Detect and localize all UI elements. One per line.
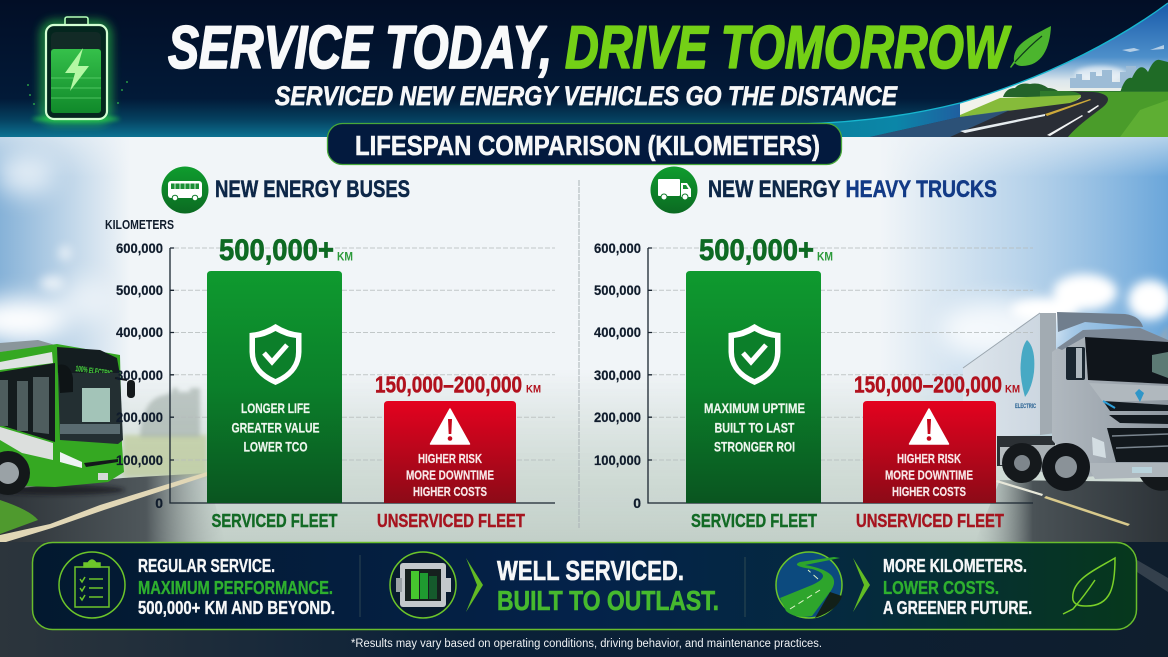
- bar: serviced fleet: KM: [337, 250, 353, 264]
- bar: serviced fleet: KM: [817, 250, 833, 264]
- icon: shield check: [728, 324, 780, 385]
- y axis labels: 300,000: [594, 367, 641, 383]
- section heading: new energy buses: [162, 166, 410, 214]
- bar: serviced fleet: [207, 234, 353, 531]
- bar: unserviced fleet: [375, 372, 541, 531]
- bar: unserviced fleet: [854, 372, 1020, 531]
- icon: leaf: [1010, 26, 1051, 68]
- divider between charts: [578, 180, 580, 528]
- y axis labels: 100,000: [116, 452, 163, 468]
- bar: unserviced fleet: HIGHER RISK: [897, 451, 961, 466]
- bar: unserviced fleet: 150,000–200,000: [854, 372, 1002, 398]
- text: regular service: 500,000+ KM AND BEYOND.: [138, 598, 335, 618]
- illustration: electric heavy truck: [963, 312, 1168, 491]
- icon: glowing battery: [27, 17, 128, 122]
- bar: serviced fleet: SERVICED FLEET: [691, 511, 817, 531]
- bar: serviced fleet: LONGER LIFE: [241, 400, 310, 416]
- text: regular service: REGULAR SERVICE.: [138, 556, 275, 576]
- bar: serviced fleet: 500,000+: [699, 234, 814, 267]
- text: regular service: MAXIMUM PERFORMANCE.: [138, 578, 333, 598]
- axis title: KILOMETERS: [105, 218, 174, 232]
- icon: leaf outline: [1063, 558, 1115, 614]
- y axis labels: 600,000: [116, 240, 163, 256]
- y axis labels: 200,000: [594, 409, 641, 425]
- bar: unserviced fleet: KM: [526, 384, 541, 396]
- bar: unserviced fleet: HIGHER RISK: [418, 451, 482, 466]
- y axis labels: 400,000: [116, 324, 163, 340]
- icon: clipboard checklist: [59, 552, 125, 618]
- subtitle: SERVICED NEW ENERGY VEHICLES GO THE DISTANCE: [275, 81, 898, 111]
- bar: serviced fleet: STRONGER ROI: [714, 438, 795, 454]
- bar: unserviced fleet: UNSERVICED FLEET: [377, 511, 525, 531]
- icon: warning triangle: [910, 409, 948, 444]
- bar: serviced fleet: BUILT TO LAST: [714, 420, 795, 436]
- icon: shield check: [250, 324, 302, 385]
- bar: serviced fleet: LOWER TCO: [244, 438, 308, 454]
- bar: serviced fleet: GREATER VALUE: [232, 420, 320, 436]
- y axis labels: [116, 240, 163, 511]
- bar: serviced fleet: 500,000+: [219, 234, 334, 267]
- y axis labels: 400,000: [594, 324, 641, 340]
- heading pill: lifespan comparison: LIFESPAN COMPARISON (KILOMETERS): [355, 130, 820, 161]
- bar: serviced fleet: MAXIMUM UPTIME: [704, 400, 805, 416]
- y axis labels: 0: [155, 495, 163, 511]
- y axis labels: 200,000: [116, 409, 163, 425]
- arrow: chevron: [466, 558, 483, 612]
- text: well serviced: WELL SERVICED.: [497, 555, 684, 586]
- bar: unserviced fleet: HIGHER COSTS: [413, 484, 487, 499]
- header banner: [0, 0, 1168, 137]
- title: [168, 14, 1011, 81]
- background: sky, haze and road: [0, 137, 1168, 657]
- icon: truck: [650, 166, 698, 214]
- icon: serviced battery module: [390, 552, 456, 618]
- y axis labels: 600,000: [594, 240, 641, 256]
- section heading: new energy heavy trucks: NEW ENERGY HEAVY TRUCKS: [708, 176, 997, 203]
- bar: unserviced fleet: HIGHER COSTS: [892, 484, 966, 499]
- text: more kilometers: A GREENER FUTURE.: [883, 598, 1032, 618]
- text: well serviced: [497, 555, 719, 616]
- bar: unserviced fleet: MORE DOWNTIME: [885, 468, 973, 482]
- section heading: new energy buses: NEW ENERGY BUSES: [215, 176, 410, 203]
- y axis labels: 300,000: [116, 367, 163, 383]
- bar: unserviced fleet: UNSERVICED FLEET: [856, 511, 1004, 531]
- text: more kilometers: MORE KILOMETERS.: [883, 556, 1027, 576]
- footnote: *Results may vary based on operating conditions, driving behavior, and maintenance practices.: [351, 638, 822, 650]
- y axis labels: 500,000: [594, 282, 641, 298]
- y axis labels: 0: [633, 495, 641, 511]
- bar: unserviced fleet: 150,000–200,000: [375, 372, 522, 398]
- text: well serviced: BUILT TO OUTLAST.: [497, 585, 719, 616]
- icon: winding road: [776, 552, 842, 618]
- heading pill: lifespan comparison: [328, 124, 842, 164]
- y axis labels: [594, 240, 641, 511]
- section heading: new energy heavy trucks: [650, 166, 997, 214]
- icon: warning triangle: [430, 409, 470, 444]
- text: regular service: [138, 556, 335, 618]
- icon: bus: [162, 166, 208, 214]
- bar: unserviced fleet: KM: [1005, 384, 1020, 396]
- arrow: chevron: [853, 558, 870, 612]
- y axis labels: 500,000: [116, 282, 163, 298]
- text: more kilometers: LOWER COSTS.: [883, 578, 999, 598]
- decorative sparks: [27, 81, 128, 105]
- title: DRIVE TOMORROW: [565, 14, 1011, 81]
- text: more kilometers: [883, 556, 1032, 618]
- y axis labels: 100,000: [594, 452, 641, 468]
- title: SERVICE TODAY,: [168, 14, 552, 81]
- bottom banner: [32, 542, 1136, 630]
- bar: unserviced fleet: MORE DOWNTIME: [406, 468, 494, 482]
- illustration: electric heavy truck: ELECTRIC: [1015, 404, 1036, 410]
- illustration: electric bus: 100% ELECTRIC: [75, 364, 113, 378]
- chart: truck lifespan comparison: [594, 234, 1033, 531]
- illustration: road and skyline landscape: [870, 0, 1168, 137]
- chart: bus lifespan comparison: [105, 218, 555, 531]
- bar: serviced fleet: [686, 234, 833, 531]
- illustration: electric bus: [0, 340, 135, 495]
- bar: serviced fleet: SERVICED FLEET: [212, 511, 338, 531]
